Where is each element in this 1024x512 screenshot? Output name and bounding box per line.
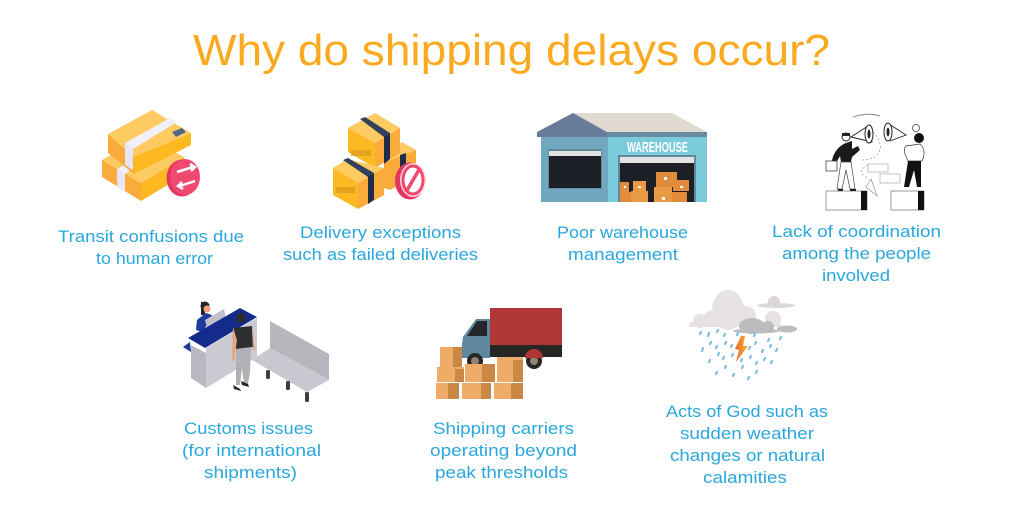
caption: customs: shipments) — [204, 463, 297, 482]
caption: carriers — [430, 419, 577, 482]
caption: delivery exceptions: such as failed deliveries — [283, 245, 478, 264]
icon: truck and stacked boxes — [436, 308, 562, 399]
icon: warehouse building — [537, 113, 707, 202]
caption: carriers: Shipping carriers — [433, 419, 574, 438]
panel: carriers — [430, 308, 577, 482]
caption: acts of God: Acts of God such as — [666, 402, 828, 421]
title: Why do shipping delays occur? — [193, 26, 830, 75]
caption: acts of God: calamities — [703, 468, 787, 487]
caption: coordination — [772, 222, 941, 285]
panel: delivery exceptions — [283, 113, 478, 264]
caption: warehouse: management — [568, 245, 678, 264]
caption: transit confusions: to human error — [96, 249, 213, 268]
caption: carriers: peak thresholds — [435, 463, 568, 482]
panel: customs — [182, 302, 329, 482]
panel: warehouse — [537, 113, 707, 264]
caption: delivery exceptions — [283, 223, 478, 264]
caption: acts of God: changes or natural — [670, 446, 825, 465]
caption: customs: Customs issues — [184, 419, 313, 438]
caption: coordination: Lack of coordination — [772, 222, 941, 241]
caption: customs — [182, 419, 321, 482]
caption: acts of God: sudden weather — [680, 424, 814, 443]
caption: carriers: operating beyond — [430, 441, 577, 460]
panel: acts of God — [666, 290, 828, 487]
icon: two people with megaphones — [826, 114, 924, 210]
caption: transit confusions: Transit confusions due — [58, 227, 244, 246]
caption: warehouse: Poor warehouse — [557, 223, 688, 242]
caption: customs: (for international — [182, 441, 321, 460]
caption: transit confusions — [58, 227, 244, 268]
caption: warehouse — [557, 223, 688, 264]
icon: storm cloud, rain and lightning — [689, 290, 797, 379]
caption: coordination: involved — [822, 266, 890, 285]
panel: coordination — [772, 114, 941, 285]
caption: delivery exceptions: Delivery exceptions — [300, 223, 461, 242]
icon: warehouse building: WAREHOUSE — [627, 139, 688, 156]
icon: stacked boxes with swap badge — [102, 110, 200, 201]
caption: coordination: among the people — [782, 244, 931, 263]
icon: boxes with prohibited badge — [333, 113, 426, 209]
caption: acts of God — [666, 402, 828, 487]
panel: transit confusions — [58, 110, 244, 268]
icon: customs desk and bench — [183, 302, 329, 402]
